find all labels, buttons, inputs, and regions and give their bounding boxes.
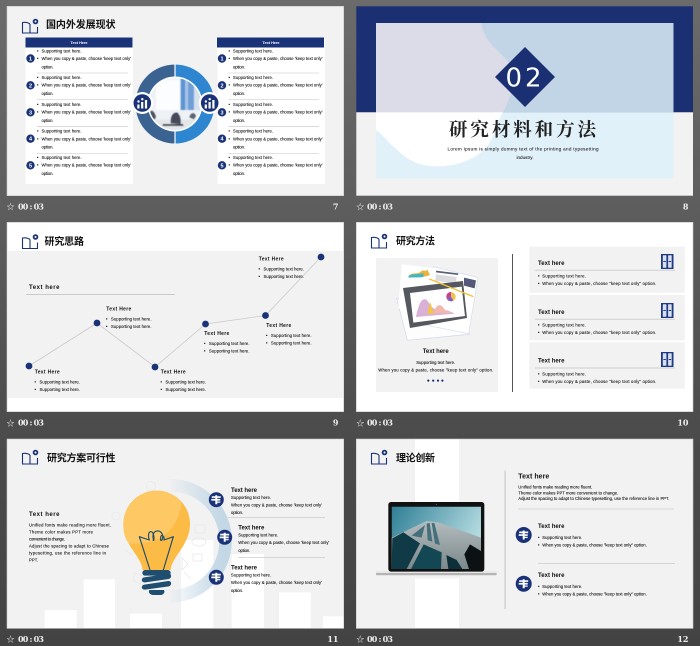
node text 2: Supporting text here. [111,324,152,329]
left text block: Unified fonts make reading more fluent. [29,523,111,528]
right text block 2: option. [238,548,250,553]
diamond number badge [495,47,555,107]
right list panel: Supporting text here. [233,102,273,107]
right card 1: Text here [538,261,565,267]
node text 5 [266,323,312,345]
slide 7 footer: ☆ [6,202,14,212]
right text block 1: Supporting text here. [231,495,271,500]
right text block 1 [228,488,325,517]
node text 5: Text Here [266,323,292,329]
node text 1: Text Here [35,370,60,376]
node text 3 [160,370,206,392]
left image card: When you copy & paste, choose "keep text only" option. [378,368,493,373]
left list panel: option. [42,118,54,123]
item 2: Text here [538,573,565,579]
slide 12 footer: 00 : 03 [367,634,393,644]
right list panel: • [228,163,230,168]
illustration: documents and tablet [397,264,478,340]
left list panel: When you copy & paste, choose 'keep text only' [42,136,131,141]
node text 6: Text Here [259,256,284,262]
section subtitle: Lorem Ipsum is simply dummy text of the printing and typesetting [448,146,599,152]
slide 10 footer: 10 [677,418,689,428]
node text 2 [106,306,152,329]
item 2: • [538,584,540,589]
node text 4: • [204,341,206,346]
left list panel: Supporting text here. [42,155,82,160]
right list panel: Supporting text here. [233,75,273,80]
right list panel: option. [233,118,245,123]
slide 12 heading: 理论创新 [396,452,435,464]
left list panel: Supporting text here. [42,49,82,54]
icon: chart badge right [199,92,221,114]
section subtitle [448,146,599,160]
left image card: Supporting text here. [416,360,455,365]
node text 5: Supporting text here. [271,333,312,338]
slide 7 footer: 00 : 03 [18,201,44,211]
slide 7 heading: 国内外发展现状 [46,18,116,31]
node text 4: • [204,349,206,354]
left list panel: • [37,136,39,141]
right text block 1: option. [231,510,243,515]
left list panel: • [37,129,39,134]
node text 2: Text Here [106,306,132,312]
left list panel: • [37,163,39,168]
section title: 研究材料和方法 [449,120,597,141]
panel: slide 12 theoretical innovation [356,439,693,644]
slide 9 footer: 9 [333,418,339,428]
slide 8 footer: ☆ [356,202,364,212]
right list panel: option. [233,64,245,70]
node text 1 [34,370,80,392]
left image card: Text here [423,349,449,355]
right card 3: When you copy & paste, choose "keep text only" option. [542,379,656,384]
right list panel: Supporting text here. [233,129,273,134]
right list panel: • [228,102,230,107]
panel: slide 7 domestic and overseas status [6,6,344,211]
right list panel: 5 [220,163,224,169]
right list panel: option. [233,91,245,96]
left list panel: • [37,110,39,115]
right list panel: option. [233,144,245,150]
left list panel: When you copy & paste, choose 'keep text only' [42,83,131,88]
icon: light bulb [123,491,190,595]
slide 11 footer: 11 [327,634,338,644]
right card 1: • [538,281,540,286]
node text 5: • [266,333,268,338]
right text block 3: Supporting text here. [231,572,271,578]
left list panel: • [37,155,39,160]
left text block [29,512,111,562]
left list panel: 2 [29,83,32,89]
line chart path [26,254,324,370]
icon: chart badge left [131,92,153,114]
panel: slide 11 feasibility [6,439,344,644]
right card 2: Text here [538,310,565,316]
left list panel: When you copy & paste, choose 'keep text only' [42,110,131,115]
slide 10 heading: 研究方法 [396,234,435,248]
slide 11 footer: 00 : 03 [18,634,44,644]
left list panel: option. [42,144,54,150]
node text 3: Text Here [161,370,186,376]
node text 2: Supporting text here. [111,316,152,321]
right list panel: 4 [220,137,224,143]
node text 5: Supporting text here. [271,340,312,345]
right list panel [217,38,325,184]
node text 6: • [258,266,260,272]
item 2 [516,573,647,597]
node text 6 [258,256,304,279]
slide 9 heading: 研究思路 [44,235,84,248]
slide 11 heading: 研究方案可行性 [47,452,116,464]
vertical divider [504,471,506,609]
left list panel: Supporting text here. [42,75,82,80]
right card 1: Supporting text here. [542,273,586,278]
circular ring diagram with office photo [136,64,214,144]
item 1 [516,524,675,563]
panel: slide 8 section title [356,6,693,211]
item 1: • [538,535,540,540]
left list panel: 3 [29,110,32,116]
slide 8 footer: 8 [683,201,689,211]
right card 3: Text here [538,358,565,364]
right text block 2: Supporting text here. [238,532,278,538]
vertical divider [512,254,513,392]
right text block 2: When you copy & paste, choose 'keep text only' [238,540,329,545]
icon: badge 3 [209,570,224,585]
section subtitle: industry. [516,155,534,160]
node text 2: • [106,324,108,329]
laptop image [376,502,497,578]
right list panel: Supporting text here. [233,49,273,54]
right text block 2 [238,526,329,557]
node text 4 [204,331,250,354]
node text 4: Supporting text here. [209,349,250,354]
slide 12 footer [356,634,688,644]
top text block: Adjust the spacing to adapt to Chinese typesetting, use the reference line in PPT. [518,496,669,501]
right card 3: • [538,371,540,376]
left image card [376,258,498,392]
left list panel: option. [42,171,54,176]
left list panel: • [37,75,39,80]
item 1: Supporting text here. [542,535,582,540]
right list panel: • [228,129,230,134]
item 1: Text here [538,524,565,530]
left list panel: option. [42,91,54,96]
top text block: Theme color makes PPT more convenient to change. [518,490,618,495]
slide 9 footer: 00 : 03 [18,418,44,428]
slide 11 footer: ☆ [6,635,14,644]
right text block 1: When you copy & paste, choose 'keep text only' [231,502,322,508]
node text 5: • [266,340,268,345]
right list panel: • [228,49,230,54]
left text block: Adjust the spacing to adapt to Chinese [29,544,110,549]
node text 3: • [160,387,162,392]
right list panel: When you copy & paste, choose 'keep text only' [233,136,323,141]
slide 8 footer [356,201,689,212]
right card 2: When you copy & paste, choose "keep text only" option. [542,330,656,335]
right card 2 [529,295,685,340]
left text block: typesetting, use the reference line in [29,550,107,555]
left list panel: option. [42,64,54,70]
slide 11 heading [22,450,116,464]
node text 1: Supporting text here. [40,380,80,384]
right text block 3: option. [231,588,243,593]
right list panel: 3 [220,110,224,116]
node text 3: • [160,380,162,384]
left list panel: • [37,56,39,61]
right list panel: When you copy & paste, choose 'keep text only' [233,83,323,88]
faint doodles around bulb [112,482,206,584]
node text 6: Supporting text here. [264,274,304,279]
right text block 2: Text here [238,526,265,532]
right text block 3: Text here [231,566,258,572]
panel: slide 10 research methods [356,222,693,428]
left list panel: • [37,83,39,88]
slide 10 footer: 00 : 03 [367,418,393,428]
left list panel: • [37,49,39,54]
left text block: Text here [29,512,60,518]
blob panel [376,23,674,178]
right list panel: • [228,110,230,115]
right card 3: • [538,379,540,384]
item 2: When you copy & paste, choose "keep text only" option. [542,592,647,597]
right text block 3: When you copy & paste, choose 'keep text only' [231,580,322,585]
left text block: Theme color makes PPT more [29,529,94,534]
node text 3: Supporting text here. [166,380,206,384]
right list panel: • [228,56,230,61]
right card 3 [529,342,685,389]
right list panel: • [228,136,230,141]
item 1: When you copy & paste, choose "keep text only" option. [542,543,647,548]
icon: badge 2 [217,530,232,545]
right list panel: Supporting text here. [233,155,273,160]
arc ring [170,485,226,596]
left list panel [26,38,133,184]
slide 8 footer: 00 : 03 [367,201,393,211]
right list panel: When you copy & paste, choose 'keep text only' [233,163,323,168]
left list panel: Text Here [70,41,88,45]
node text 6: Supporting text here. [264,266,304,272]
item 1: • [538,543,540,548]
node text 6: • [258,274,260,279]
left list panel: 5 [29,163,32,169]
background white bars [45,540,343,628]
top text block: Text here [518,474,549,480]
slide 9 footer [6,418,339,428]
left list panel: Supporting text here. [42,129,82,134]
left list panel: When you copy & paste, choose 'keep text only' [42,56,131,61]
right list panel: option. [233,171,245,176]
slide 7 footer: 7 [333,201,338,211]
diamond number badge: 02 [505,64,545,94]
slide 7 footer [6,201,338,212]
left list panel: Supporting text here. [42,102,82,107]
node text 3: Supporting text here. [166,387,206,392]
node text 4: Text Here [204,331,230,337]
right card 1: • [538,273,540,278]
right list panel: • [228,75,230,80]
slide 11 footer [6,634,338,644]
top text block [518,474,674,509]
node text 1: • [34,387,36,392]
right list panel: When you copy & paste, choose 'keep text only' [233,56,323,61]
left list panel: • [37,102,39,107]
node text 1: • [34,380,36,384]
icon: badge 1 [209,492,224,507]
right list panel: • [228,83,230,88]
right card 1: When you copy & paste, choose "keep text only" option. [542,281,656,286]
left list panel: 4 [29,137,33,143]
slide 9 footer: ☆ [6,419,14,428]
item 2: Supporting text here. [542,584,582,589]
text here heading: Text here [29,285,60,291]
node text 2: • [106,316,108,321]
node text 4: Supporting text here. [209,341,250,346]
slide 12 heading [372,450,435,464]
left list panel: When you copy & paste, choose 'keep text only' [42,163,131,168]
right card 2: Supporting text here. [542,322,586,327]
slide 10 footer [356,418,689,428]
right list panel: Text Here [262,41,280,45]
left text block: convenient to change. [29,536,65,541]
slide 10 heading [372,234,435,248]
white vertical band [415,440,459,628]
right card 1 [529,247,685,293]
right card 2: • [538,322,540,327]
slide 10 footer: ☆ [356,419,364,428]
slide 7 heading [22,18,116,33]
left text block: PPT. [29,557,38,562]
right card 3: Supporting text here. [542,371,586,376]
right text block 3 [231,566,322,593]
slide 9 heading [22,234,84,248]
left list panel: 1 [29,56,32,62]
node text 1: Supporting text here. [40,387,80,392]
slide 12 footer: 12 [677,634,688,644]
top text block: Unified fonts make reading more fluent. [518,484,592,490]
item 2: • [538,592,540,597]
right list panel: When you copy & paste, choose 'keep text only' [233,110,323,115]
right list panel: 1 [220,56,224,62]
right card 2: • [538,330,540,335]
right list panel: 2 [220,83,224,89]
right text block 1: Text here [231,488,258,494]
right list panel: • [228,155,230,160]
slide 12 footer: ☆ [356,635,364,644]
panel: slide 9 research roadmap [6,222,344,428]
